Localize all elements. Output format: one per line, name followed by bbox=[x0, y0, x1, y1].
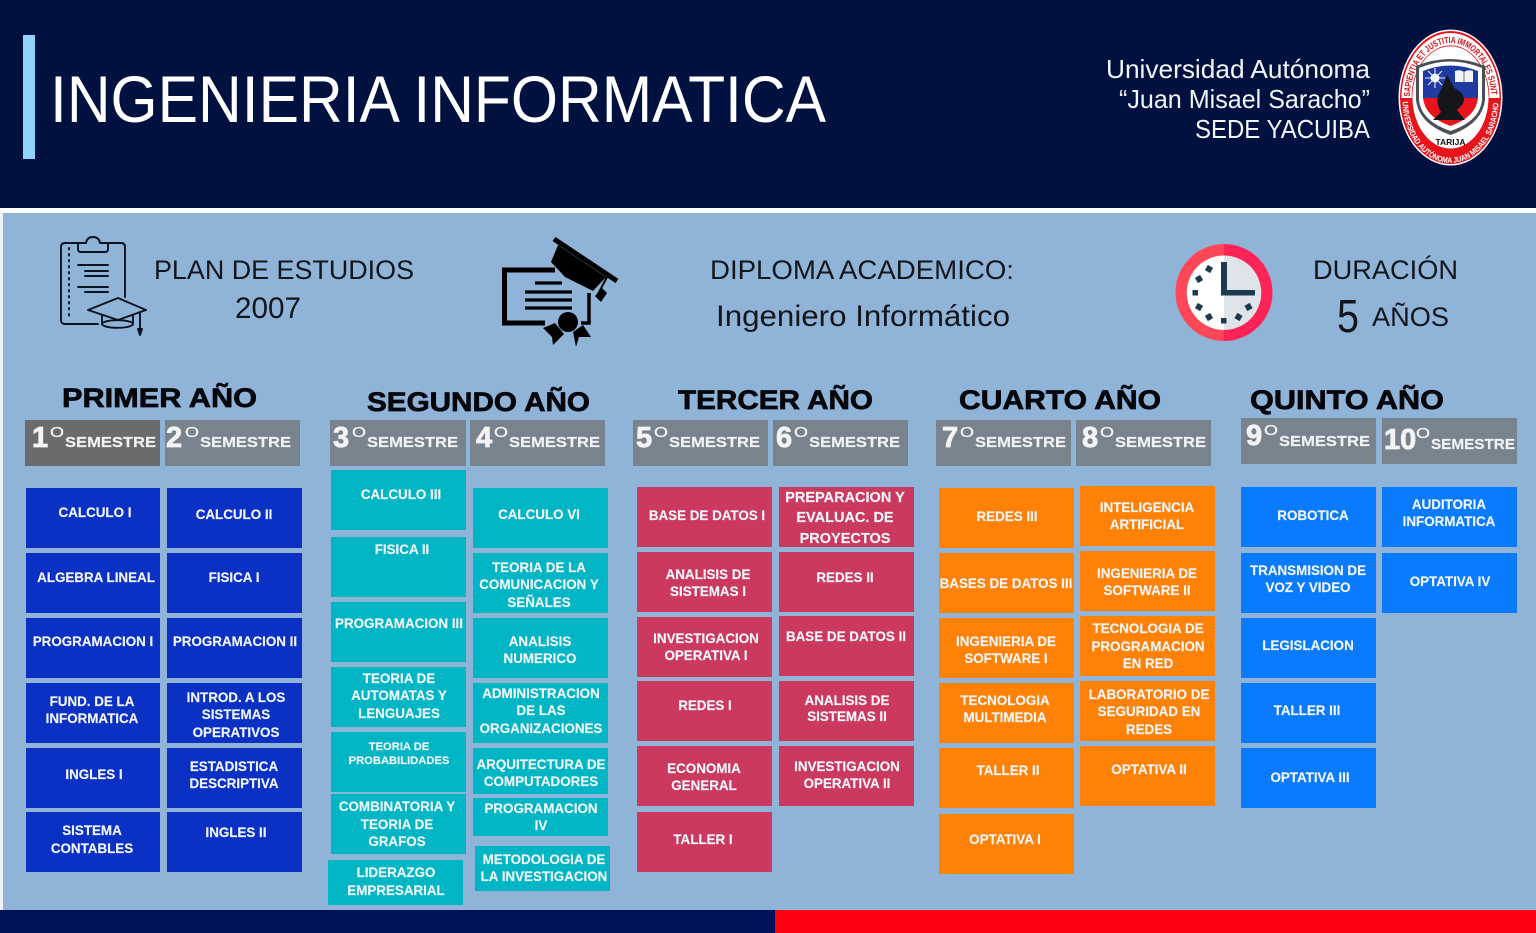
courses: semester 2 bbox=[167, 488, 302, 872]
courses: semester 4: METODOLOGIA DE bbox=[483, 852, 605, 867]
courses: semester 8: REDES bbox=[1126, 722, 1172, 737]
semester header 9: 9 bbox=[1246, 420, 1262, 452]
courses: semester 4: PROGRAMACION bbox=[484, 801, 598, 816]
icon: clock bbox=[1175, 244, 1272, 341]
courses: semester 6: PROYECTOS bbox=[800, 531, 891, 547]
semester header 7: 7 bbox=[942, 422, 958, 454]
white divider bbox=[0, 208, 1536, 213]
semester header 6: 6 bbox=[776, 422, 792, 454]
courses: semester 3: TEORIA DE bbox=[363, 671, 435, 686]
courses: semester 3: AUTOMATAS Y bbox=[351, 688, 447, 703]
courses: semester 10 bbox=[1382, 487, 1517, 613]
semester header 10: SEMESTRE bbox=[1431, 436, 1515, 453]
courses: semester 6: BASE DE DATOS II bbox=[786, 629, 906, 644]
courses: semester 4: CALCULO VI bbox=[498, 507, 580, 522]
university name: SEDE YACUIBA bbox=[1195, 114, 1371, 144]
icon: university crest: TARIJA bbox=[1435, 137, 1466, 147]
courses: semester 7: REDES III bbox=[976, 509, 1038, 524]
semester header 1: O bbox=[50, 424, 64, 441]
semester header 5: SEMESTRE bbox=[669, 434, 760, 451]
semester header 4 bbox=[470, 420, 605, 466]
year: 2007: 2007 bbox=[235, 292, 301, 325]
courses: semester 3: PROBABILIDADES bbox=[349, 755, 450, 767]
semester header 3: O bbox=[352, 424, 366, 441]
courses: semester 9 bbox=[1241, 487, 1376, 808]
courses: semester 8: INTELIGENCIA bbox=[1100, 500, 1195, 515]
courses: semester 1: CONTABLES bbox=[51, 841, 133, 856]
footer bar bbox=[0, 910, 1536, 933]
courses: semester 4 bbox=[473, 488, 610, 891]
courses: semester 3 bbox=[328, 470, 466, 905]
semester header 2 bbox=[165, 420, 300, 466]
courses: semester 7: BASES DE DATOS III bbox=[940, 576, 1072, 591]
courses: semester 8: OPTATIVA II bbox=[1111, 762, 1187, 777]
courses: semester 3: COMBINATORIA Y bbox=[339, 799, 455, 814]
semester header 5 bbox=[633, 420, 768, 466]
courses: semester 2: PROGRAMACION II bbox=[173, 634, 297, 649]
heading: quinto año: QUINTO AÑO bbox=[1250, 384, 1444, 415]
courses: semester 8: SEGURIDAD EN bbox=[1098, 704, 1200, 719]
courses: semester 8: ARTIFICIAL bbox=[1110, 517, 1184, 532]
semester header 2: O bbox=[185, 424, 199, 441]
courses: semester 8: SOFTWARE II bbox=[1103, 583, 1191, 598]
heading: duracion: DURACIÓN bbox=[1313, 254, 1458, 285]
header band bbox=[23, 30, 1502, 166]
courses: semester 9: VOZ Y VIDEO bbox=[1265, 580, 1351, 595]
courses: semester 7: SOFTWARE I bbox=[964, 651, 1048, 666]
degree name: Ingeniero Informático bbox=[716, 300, 1010, 333]
courses: semester 5: TALLER I bbox=[673, 832, 733, 847]
courses: semester 5 bbox=[637, 487, 772, 872]
courses: semester 2: SISTEMAS bbox=[202, 707, 270, 722]
courses: semester 3: FISICA II bbox=[375, 542, 429, 557]
semester header 4: 4 bbox=[476, 422, 492, 454]
courses: semester 3: LENGUAJES bbox=[358, 706, 440, 721]
title: INGENIERIA INFORMATICA bbox=[50, 62, 826, 136]
courses: semester 7: TECNOLOGIA bbox=[960, 693, 1050, 708]
semester header 3 bbox=[330, 420, 466, 466]
semester header 3: 3 bbox=[333, 422, 349, 454]
courses: semester 4: ANALISIS bbox=[509, 634, 571, 649]
heading: cuarto año: CUARTO AÑO bbox=[959, 384, 1161, 415]
courses: semester 4: DE LAS bbox=[516, 703, 566, 718]
courses: semester 6: INVESTIGACION bbox=[794, 759, 900, 774]
courses: semester 7: TALLER II bbox=[977, 763, 1039, 778]
duration value: 5 bbox=[1337, 290, 1359, 342]
semester header 2: 2 bbox=[166, 422, 182, 454]
courses: semester 1 bbox=[26, 488, 160, 872]
courses: semester 4: LA INVESTIGACION bbox=[481, 869, 607, 884]
semester header 7 bbox=[936, 420, 1071, 466]
courses: semester 9: ROBOTICA bbox=[1277, 508, 1349, 523]
courses: semester 9: LEGISLACION bbox=[1262, 638, 1354, 653]
semester header 4: O bbox=[494, 424, 508, 441]
courses: semester 1: CALCULO I bbox=[59, 505, 131, 520]
courses: semester 6: REDES II bbox=[816, 570, 874, 585]
semester header 6: O bbox=[794, 424, 808, 441]
courses: semester 5: ANALISIS DE bbox=[666, 567, 750, 582]
courses: semester 9: OPTATIVA III bbox=[1270, 770, 1350, 785]
courses: semester 3: TEORIA DE bbox=[369, 741, 430, 753]
heading: plan de estudios: PLAN DE ESTUDIOS bbox=[154, 255, 414, 285]
icon: clipboard with graduation cap bbox=[61, 237, 146, 335]
courses: semester 8: LABORATORIO DE bbox=[1089, 687, 1209, 702]
heading: tercer año: TERCER AÑO bbox=[678, 384, 873, 415]
semester header 8: SEMESTRE bbox=[1115, 434, 1206, 451]
panel: segundo año bbox=[328, 386, 610, 905]
semester header 3: SEMESTRE bbox=[367, 434, 458, 451]
courses: semester 4: ADMINISTRACION bbox=[482, 686, 600, 701]
heading: primer año: PRIMER AÑO bbox=[62, 382, 257, 413]
semester header 8 bbox=[1076, 420, 1211, 466]
university name: Universidad Autónoma bbox=[1106, 54, 1371, 84]
semester header 9 bbox=[1241, 418, 1376, 464]
courses: semester 6: ANALISIS DE bbox=[805, 693, 889, 708]
heading: segundo año: SEGUNDO AÑO bbox=[367, 386, 590, 417]
courses: semester 4: NUMERICO bbox=[504, 651, 576, 666]
courses: semester 5: REDES I bbox=[678, 698, 732, 713]
semester header 7: SEMESTRE bbox=[975, 434, 1066, 451]
semester header 1 bbox=[25, 420, 160, 466]
semester header 5: O bbox=[654, 424, 668, 441]
semester header 10 bbox=[1382, 418, 1517, 464]
courses: semester 5: SISTEMAS I bbox=[670, 584, 746, 599]
courses: semester 8 bbox=[1080, 486, 1215, 806]
courses: semester 4: ORGANIZACIONES bbox=[480, 721, 602, 736]
courses: semester 1: SISTEMA bbox=[62, 823, 122, 838]
courses: semester 1: FUND. DE LA bbox=[50, 694, 135, 709]
courses: semester 3: LIDERAZGO bbox=[357, 865, 435, 880]
courses: semester 2: INTROD. A LOS bbox=[187, 690, 285, 705]
duration value bbox=[1337, 290, 1449, 342]
courses: semester 5: INVESTIGACION bbox=[653, 631, 759, 646]
info block: plan de estudios bbox=[61, 237, 414, 335]
semester header 10: 10 bbox=[1384, 424, 1416, 456]
courses: semester 4: ARQUITECTURA DE bbox=[477, 757, 606, 772]
courses: semester 6: PREPARACION Y bbox=[785, 490, 905, 506]
courses: semester 8: EN RED bbox=[1123, 656, 1174, 671]
courses: semester 8: INGENIERIA DE bbox=[1097, 566, 1197, 581]
courses: semester 1: INGLES I bbox=[65, 767, 123, 782]
semester header 8: 8 bbox=[1082, 422, 1098, 454]
courses: semester 2: CALCULO II bbox=[196, 507, 272, 522]
info block: diploma academico bbox=[504, 239, 1014, 347]
courses: semester 3: CALCULO III bbox=[361, 487, 441, 502]
courses: semester 4: TEORIA DE LA bbox=[492, 560, 586, 575]
university name bbox=[1106, 54, 1371, 144]
courses: semester 4: IV bbox=[535, 818, 547, 833]
heading: diploma academico: DIPLOMA ACADEMICO: bbox=[710, 255, 1014, 285]
main panel background bbox=[0, 213, 1536, 910]
courses: semester 2: OPERATIVOS bbox=[193, 725, 279, 740]
courses: semester 5: ECONOMIA bbox=[667, 761, 741, 776]
duration value: AÑOS bbox=[1372, 301, 1449, 332]
courses: semester 6: SISTEMAS II bbox=[807, 709, 887, 724]
info block: duracion bbox=[1175, 244, 1458, 342]
courses: semester 1: INFORMATICA bbox=[46, 711, 139, 726]
semester header 9: O bbox=[1264, 422, 1278, 439]
courses: semester 7: MULTIMEDIA bbox=[963, 710, 1047, 725]
courses: semester 1: PROGRAMACION I bbox=[33, 634, 153, 649]
courses: semester 2: ESTADISTICA bbox=[190, 759, 278, 774]
semester header 7: O bbox=[960, 424, 974, 441]
panel: primer año bbox=[25, 382, 302, 872]
courses: semester 2: FISICA I bbox=[209, 570, 259, 585]
courses: semester 3: GRAFOS bbox=[368, 834, 426, 849]
courses: semester 9: TRANSMISION DE bbox=[1250, 563, 1366, 578]
icon: university crest: SAPIENTIA ET JUSTITIA IMMORTALES SUNT bbox=[1404, 36, 1498, 96]
courses: semester 4: COMPUTADORES bbox=[484, 774, 598, 789]
courses: semester 10: INFORMATICA bbox=[1403, 514, 1496, 529]
courses: semester 6 bbox=[779, 487, 914, 806]
semester header 5: 5 bbox=[636, 422, 652, 454]
panel: tercer año bbox=[633, 384, 914, 872]
university name: “Juan Misael Saracho” bbox=[1119, 84, 1370, 114]
semester header 4: SEMESTRE bbox=[509, 434, 600, 451]
title accent bar bbox=[23, 35, 35, 159]
courses: semester 2: DESCRIPTIVA bbox=[189, 776, 279, 791]
courses: semester 5: BASE DE DATOS I bbox=[649, 508, 765, 523]
courses: semester 1: ALGEBRA LINEAL bbox=[37, 570, 155, 585]
courses: semester 3: EMPRESARIAL bbox=[347, 883, 445, 898]
semester header 6 bbox=[773, 420, 908, 466]
courses: semester 3: PROGRAMACION III bbox=[335, 616, 463, 631]
courses: semester 4: COMUNICACION Y bbox=[479, 577, 599, 592]
semester header 10: O bbox=[1416, 425, 1430, 442]
courses: semester 4: SEÑALES bbox=[507, 595, 571, 610]
courses: semester 8: TECNOLOGIA DE bbox=[1092, 621, 1204, 636]
semester header 1: SEMESTRE bbox=[65, 434, 156, 451]
semester header 2: SEMESTRE bbox=[200, 434, 291, 451]
icon: university crest: UNIVERSIDAD AUTÓNOMA JUAN MISAEL SARACHO bbox=[1402, 102, 1498, 163]
courses: semester 5: OPERATIVA I bbox=[664, 648, 748, 663]
courses: semester 10: OPTATIVA IV bbox=[1410, 574, 1490, 589]
semester header 9: SEMESTRE bbox=[1279, 433, 1370, 450]
courses: semester 3: TEORIA DE bbox=[361, 817, 433, 832]
courses: semester 5: GENERAL bbox=[671, 778, 737, 793]
courses: semester 7 bbox=[939, 488, 1074, 874]
courses: semester 6: EVALUAC. DE bbox=[796, 510, 894, 526]
semester header 6: SEMESTRE bbox=[809, 434, 900, 451]
icon: university crest bbox=[1398, 30, 1502, 166]
panel: quinto año bbox=[1241, 384, 1517, 808]
courses: semester 8: PROGRAMACION bbox=[1091, 639, 1205, 654]
semester header 8: O bbox=[1100, 424, 1114, 441]
courses: semester 7: OPTATIVA I bbox=[969, 832, 1041, 847]
courses: semester 7: INGENIERIA DE bbox=[956, 634, 1056, 649]
courses: semester 9: TALLER III bbox=[1274, 703, 1340, 718]
courses: semester 10: AUDITORIA bbox=[1412, 497, 1486, 512]
semester header 1: 1 bbox=[32, 422, 48, 454]
courses: semester 2: INGLES II bbox=[205, 825, 267, 840]
icon: diploma with cap bbox=[504, 239, 617, 347]
courses: semester 6: OPERATIVA II bbox=[804, 776, 890, 791]
panel: cuarto año bbox=[936, 384, 1215, 874]
